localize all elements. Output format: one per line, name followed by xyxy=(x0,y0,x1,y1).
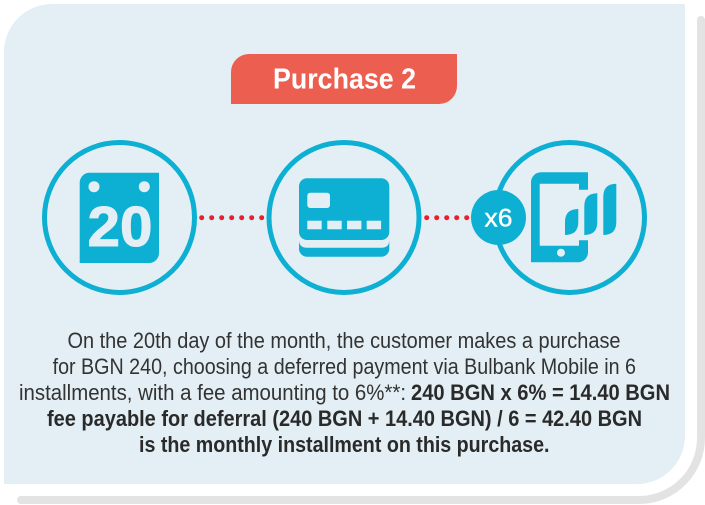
icon: calendar day 20: 20 xyxy=(88,195,152,259)
badge: x6 installments xyxy=(471,190,526,245)
heading: Purchase 2 xyxy=(231,54,457,104)
icon: mobile phone with Bulbank logo xyxy=(494,142,644,292)
text block: purchase explanation xyxy=(19,328,670,457)
heading: Purchase 2: Purchase 2 xyxy=(273,63,416,95)
text block: purchase explanation: On the 20th day of the month, the customer makes a purchase xyxy=(68,328,620,353)
icon: calendar day 20 xyxy=(44,142,194,292)
text block: purchase explanation: fee payable for deferral (240 BGN + 14.40 BGN) / 6 = 42.40 BGN xyxy=(47,406,642,431)
text block: purchase explanation: 240 BGN x 6% = 14.40 BGN xyxy=(411,380,670,405)
text block: purchase explanation: is the monthly installment on this purchase. xyxy=(139,432,550,457)
connector: dotted line calendar to card xyxy=(199,215,264,220)
icon: bank card xyxy=(269,142,419,292)
connector: dotted line card to installments xyxy=(424,215,469,220)
text block: purchase explanation: installments, with a fee amounting to 6%**: xyxy=(19,380,406,405)
text block: purchase explanation: for BGN 240, choosing a deferred payment via Bulbank Mobile in 6 xyxy=(53,354,636,379)
badge: x6 installments: x6 xyxy=(484,205,512,233)
